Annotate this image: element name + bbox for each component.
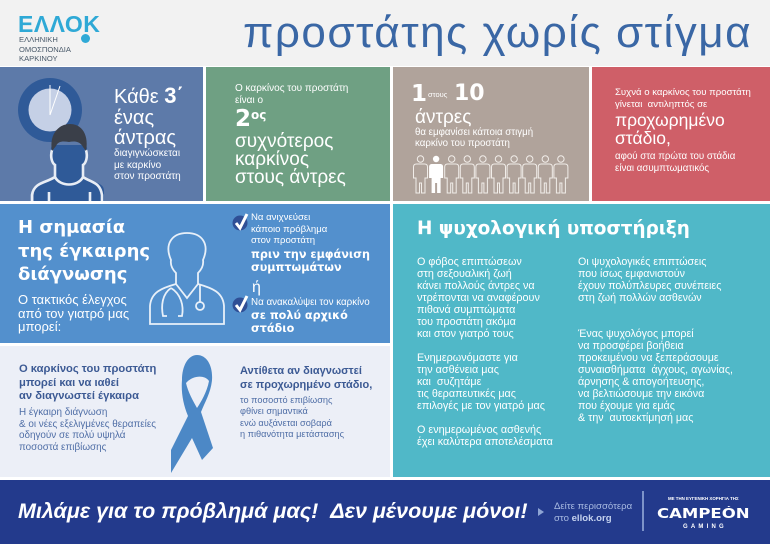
right text: ενώ αυξάνεται σοβαρά — [240, 418, 332, 428]
check text 1: κάποιο πρόβλημα — [251, 224, 327, 234]
text: καρκίνο του προστάτη — [415, 138, 510, 149]
paragraph 1: του προστάτη ακόμα — [417, 316, 516, 328]
paragraph 3 — [417, 424, 553, 448]
statement: συχνότερος — [235, 131, 333, 152]
check 2 — [232, 295, 248, 313]
icon: doctor — [149, 232, 225, 325]
1 in 10 — [411, 81, 485, 107]
panel: advanced stage — [592, 67, 770, 201]
paragraph 2 — [578, 328, 733, 424]
number one: 1 — [411, 81, 427, 107]
intro — [615, 87, 751, 110]
paragraph 1: στη ζωή πολλών ασθενών — [578, 292, 702, 304]
paragraph 2: να προσφέρει βοήθεια — [578, 340, 684, 352]
icon row: ten men — [413, 155, 568, 194]
right text: φθίνει σημαντικά — [240, 406, 308, 416]
intro text — [235, 83, 348, 106]
check text 1: στον προστάτη — [251, 235, 315, 246]
text: από τον γιατρό μας — [18, 306, 129, 320]
men: άντρες — [415, 107, 471, 128]
outro: είναι ασυμπτωματικός — [615, 163, 709, 174]
left text — [19, 407, 156, 452]
2nd: 2ος — [235, 106, 266, 132]
right text: το ποσοστό επιβίωσης — [240, 395, 332, 405]
emphasis 2: στάδιο — [251, 322, 294, 335]
logo subtitle: ΟΜΟΣΠΟΝΔΙΑ — [19, 44, 71, 54]
logo — [18, 11, 100, 63]
icon: clock and man — [18, 78, 104, 201]
statement — [235, 131, 346, 188]
subtext: με καρκίνο — [114, 160, 161, 170]
logo subtitle — [19, 35, 71, 63]
logo subtitle: ΚΑΡΚΙΝΟΥ — [19, 54, 58, 63]
right heading: Αντίθετα αν διαγνωστεί — [240, 365, 362, 377]
left text: οδηγούν σε πολύ υψηλά — [19, 430, 125, 441]
text — [415, 127, 533, 149]
paragraph 2: που έχουμε για εμάς — [578, 400, 675, 412]
subtext: διαγιγνώσκεται — [114, 148, 180, 159]
panel: prognosis — [0, 346, 390, 477]
paragraph 2: συναισθήματα άγχους, αγωνίας, — [578, 364, 733, 376]
left heading: αν διαγνωστεί έγκαιρα — [19, 390, 139, 402]
statement: καρκίνος — [235, 149, 309, 170]
left text: & οι νέες εξελιγμένες θεραπείες — [19, 418, 156, 430]
left column — [417, 256, 553, 448]
emphasis 1 — [251, 248, 370, 274]
sponsor — [657, 496, 750, 530]
paragraph 2: άρνησης & απογοήτευσης, — [578, 376, 704, 388]
paragraph 2: την ασθένεια μας — [417, 364, 499, 376]
intro text: Ο καρκίνος του προστάτη — [235, 83, 348, 94]
paragraph 1 — [578, 256, 722, 304]
paragraph 1: κάνει πολλούς άντρες να — [417, 280, 535, 292]
heading: διάγνωσης — [18, 264, 127, 285]
outro — [615, 151, 735, 174]
sponsor name: CAMPEÓN — [657, 507, 750, 522]
subtext — [114, 148, 181, 182]
panel: 1 in 10 — [393, 67, 589, 201]
right heading — [240, 365, 372, 390]
paragraph 2 — [417, 352, 545, 412]
right column — [578, 256, 733, 424]
paragraph 1: και στον γιατρό τους — [417, 328, 514, 340]
paragraph 1: που ίσως εμφανιστούν — [578, 268, 685, 280]
heading: Η ψυχολογική υποστήριξη — [417, 218, 690, 239]
emphasis 2: σε πολύ αρχικό — [251, 309, 348, 322]
heading: άντρας — [114, 127, 176, 149]
paragraph 2: τις θεραπευτικές μας — [417, 388, 516, 400]
check 1 — [232, 213, 248, 231]
header band — [0, 0, 770, 66]
heading: Η σημασία — [18, 217, 125, 238]
outro: αφού στα πρώτα του στάδια — [615, 151, 735, 162]
heading — [18, 217, 150, 285]
check text 1: Να ανιχνεύσει — [251, 212, 310, 223]
paragraph 2: και συζητάμε — [417, 376, 481, 388]
panel: second most frequent — [206, 67, 390, 201]
paragraph 3: Ο ενημερωμένος ασθενής — [417, 424, 541, 436]
left heading: μπορεί και να ιαθεί — [19, 376, 119, 388]
logo subtitle: ΕΛΛΗΝΙΚΗ — [19, 35, 58, 44]
heading: της έγκαιρης — [18, 240, 150, 262]
left text: ποσοστά επιβίωσης — [19, 442, 106, 452]
right text: η πιθανότητα μετάστασης — [240, 429, 344, 439]
sponsor sub: GAMING — [683, 524, 727, 530]
link text — [554, 501, 632, 524]
link text: στο ellok.org — [554, 513, 612, 524]
paragraph 2: επιλογές με τον γιατρό μας — [417, 400, 545, 412]
text: Ο τακτικός έλεγχος — [18, 292, 127, 307]
paragraph 3: έχει καλύτερα αποτελέσματα — [417, 436, 553, 448]
paragraph 1: έχουν πολύπλευρες συνέπειες — [578, 280, 721, 292]
emphasis: προχωρημένο — [615, 110, 725, 130]
emphasis 1: συμπτωμάτων — [251, 260, 342, 274]
intro text: είναι ο — [235, 95, 263, 106]
paragraph 2: να βελτιώσουμε την εικόνα — [578, 388, 704, 400]
icon: ribbon — [171, 355, 213, 473]
heading — [114, 83, 184, 149]
or: ή — [252, 279, 261, 296]
footer band — [0, 480, 770, 544]
statement: στους άντρες — [235, 167, 346, 188]
paragraph 2: προκειμένου να ξεπεράσουμε — [578, 352, 719, 364]
icon: arrow — [538, 508, 544, 516]
check text 2: Να ανακαλύψει τον καρκίνο — [251, 297, 370, 308]
paragraph 1: στη σεξουαλική ζωή — [417, 268, 512, 280]
heading: Κάθε 3΄ — [114, 83, 184, 108]
check text 1 — [251, 212, 327, 246]
logo wordmark: ΕΛΛΟΚ — [18, 11, 100, 37]
number ten: 10 — [454, 81, 485, 106]
heading: ένας — [114, 106, 154, 128]
intro: γίνεται αντιληπτός σε — [615, 98, 707, 110]
paragraph 1 — [417, 256, 540, 340]
emphasis — [615, 110, 725, 148]
slogan: Μιλάμε για το πρόβλημά μας! Δεν μένουμε μόνοι! — [18, 499, 528, 523]
panel: psychological support — [393, 204, 770, 477]
sponsor caption: ΜΕ ΤΗΝ ΕΥΓΕΝΙΚΗ ΧΟΡΗΓΙΑ ΤΗΣ — [668, 496, 739, 501]
left heading: Ο καρκίνος του προστάτη — [19, 363, 156, 375]
emphasis 1: πριν την εμφάνιση — [251, 248, 370, 261]
left heading — [19, 363, 156, 402]
logo dot — [81, 34, 90, 43]
intro: Συχνά ο καρκίνος του προστάτη — [615, 87, 751, 98]
panel: every 3 minutes — [0, 67, 203, 201]
paragraph 1: Οι ψυχολογικές επιπτώσεις — [578, 256, 706, 268]
text — [18, 292, 129, 334]
word in: στους — [428, 90, 447, 99]
paragraph 2: & την αυτοεκτίμησή μας — [578, 412, 693, 424]
paragraph 2: Ένας ψυχολόγος μπορεί — [578, 328, 694, 340]
paragraph 2: Ενημερωνόμαστε για — [417, 352, 518, 364]
text: θα εμφανίσει κάποια στιγμή — [415, 127, 533, 138]
text — [114, 83, 184, 182]
right text — [240, 395, 344, 439]
text: μπορεί: — [18, 319, 61, 334]
paragraph 1: ντρέπονται να αναφέρουν — [417, 292, 540, 304]
right heading: σε προχωρημένο στάδιο, — [240, 378, 372, 390]
divider — [642, 491, 644, 531]
paragraph 1: πιθανά συμπτώματα — [417, 304, 515, 316]
left text: Η έγκαιρη διάγνωση — [19, 407, 107, 418]
panel: early diagnosis — [0, 204, 390, 343]
paragraph 1: Ο φόβος επιπτώσεων — [417, 256, 522, 268]
title: προστάτης χωρίς στίγμα — [243, 8, 752, 57]
link text: Δείτε περισσότερα — [554, 501, 632, 512]
emphasis 2 — [251, 309, 348, 335]
emphasis: στάδιο, — [615, 128, 671, 148]
subtext: στον προστάτη — [114, 171, 181, 182]
